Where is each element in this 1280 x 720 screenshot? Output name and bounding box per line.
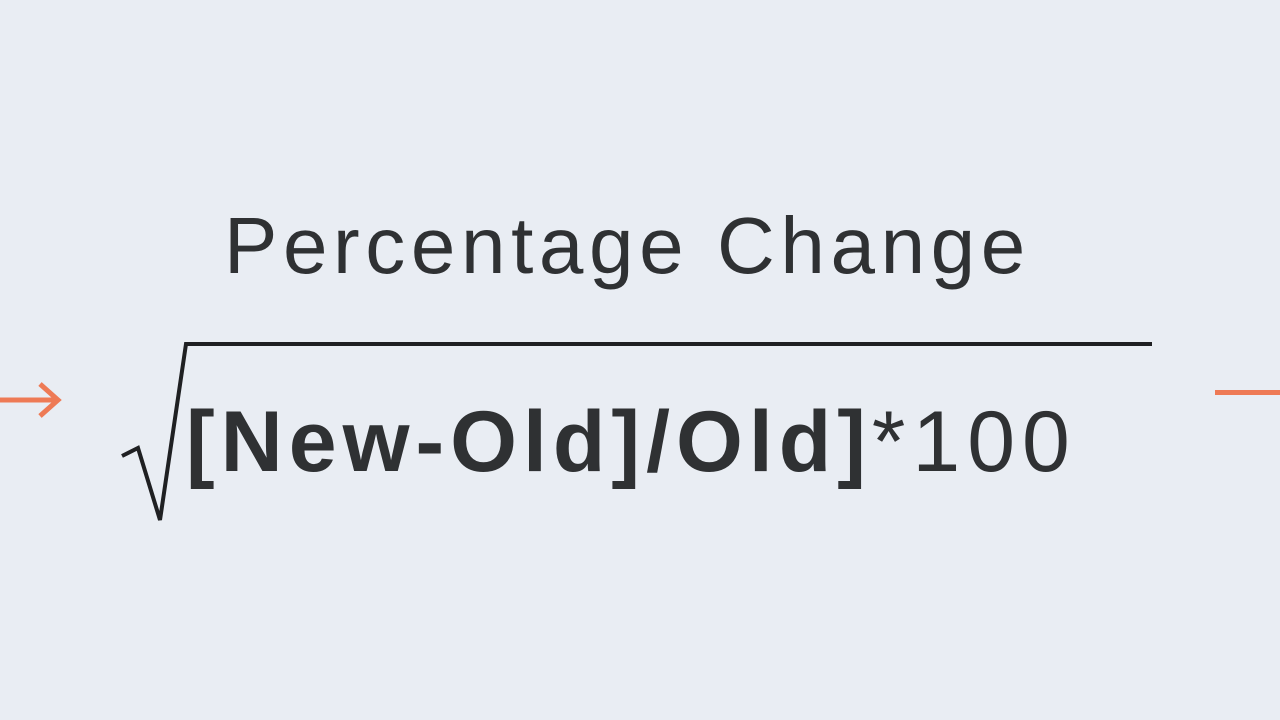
arrow: left xyxy=(0,382,62,418)
title: Percentage Change xyxy=(224,201,1031,290)
arrow: right line xyxy=(1215,390,1280,395)
formula: [New-Old]/Old]*100 xyxy=(186,394,1077,490)
